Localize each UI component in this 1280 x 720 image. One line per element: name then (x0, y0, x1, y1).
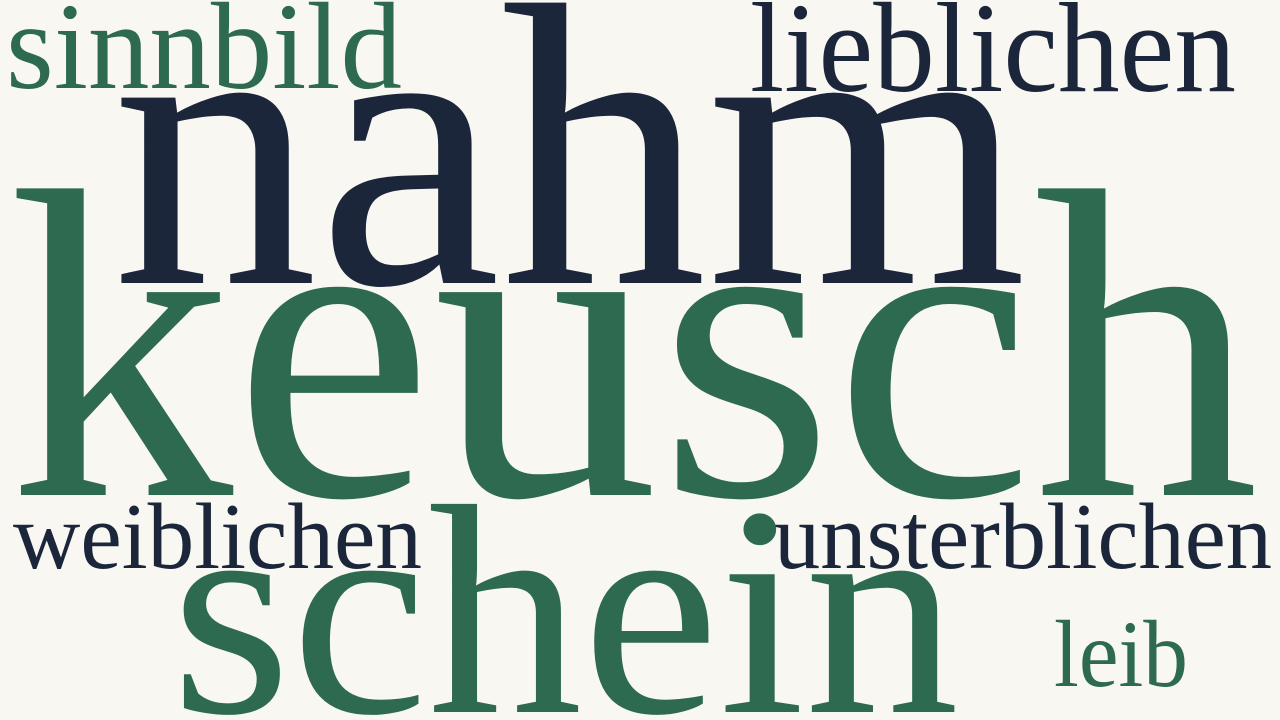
word: leib: leib (1054, 601, 1188, 707)
word: keusch: keusch (8, 101, 1259, 591)
word: weiblichen: weiblichen (13, 485, 422, 589)
word: unsterblichen: unsterblichen (774, 485, 1272, 589)
